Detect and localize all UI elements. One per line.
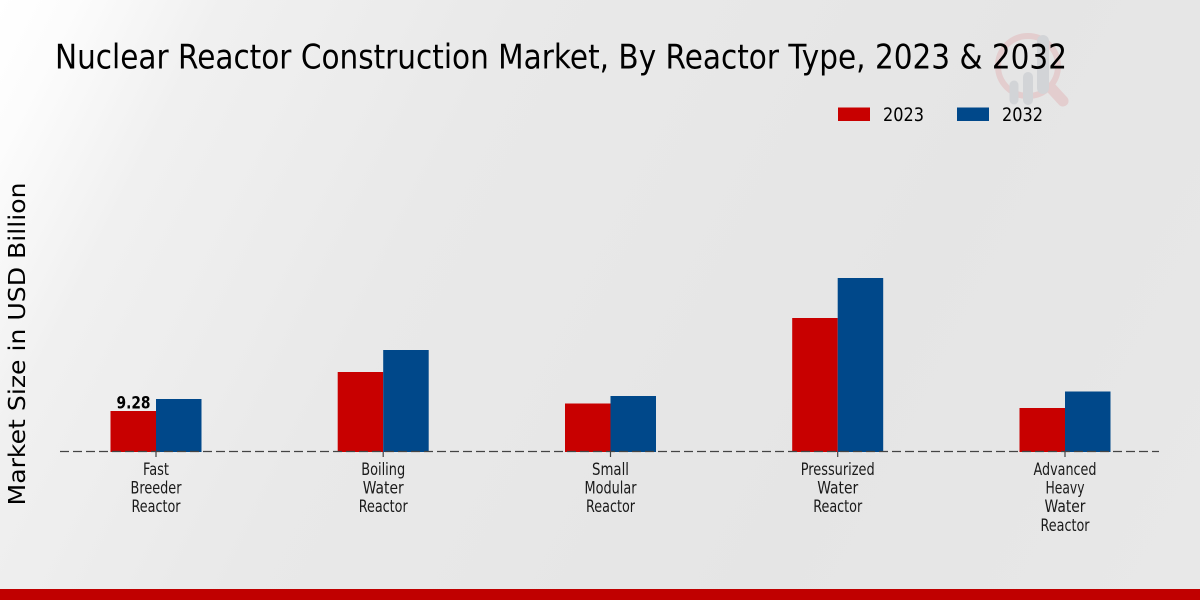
legend label: 2032: 2032 — [1002, 104, 1043, 126]
x axis baseline — [60, 450, 1159, 452]
category label: Small Modular Reactor: Modular — [584, 478, 637, 498]
bar chart — [60, 278, 1159, 457]
data label: 9.28: 9.28 — [116, 394, 150, 412]
y axis title: Market Size in USD Billion — [3, 183, 31, 505]
category label: Boiling Water Reactor: Water — [363, 478, 404, 498]
category label: Advanced Heavy Water Reactor: Reactor — [1040, 516, 1090, 535]
bars: Pressurized Water Reactor — [792, 278, 883, 452]
category label: Small Modular Reactor: Small — [592, 460, 629, 479]
category label: Fast Breeder Reactor: Reactor — [132, 497, 181, 516]
title: Nuclear Reactor Construction Market, By Reactor Type, 2023 & 2032 — [55, 38, 1067, 76]
category label: Small Modular Reactor — [584, 460, 637, 516]
category label: Pressurized Water Reactor — [801, 460, 875, 516]
bars: Small Modular Reactor — [565, 396, 656, 452]
category label: Boiling Water Reactor — [359, 460, 408, 516]
legend swatch: 2023 — [838, 108, 870, 121]
category label: Advanced Heavy Water Reactor: Water — [1044, 497, 1086, 516]
category label: Pressurized Water Reactor: Pressurized — [801, 460, 875, 479]
icon: watermark logo — [998, 36, 1063, 101]
category label: Small Modular Reactor: Reactor — [586, 497, 635, 516]
category label: Boiling Water Reactor: Boiling — [361, 460, 405, 479]
bars: Boiling Water Reactor — [338, 350, 429, 452]
category label: Fast Breeder Reactor: Breeder — [130, 478, 182, 498]
category label: Advanced Heavy Water Reactor — [1034, 460, 1096, 535]
category label: Advanced Heavy Water Reactor: Heavy — [1046, 478, 1085, 498]
legend label: 2023: 2023 — [883, 104, 924, 126]
bars: Fast Breeder Reactor — [110, 399, 202, 452]
category label: Advanced Heavy Water Reactor: Advanced — [1034, 460, 1096, 479]
category label: Pressurized Water Reactor: Reactor — [813, 497, 862, 516]
bars: Advanced Heavy Water Reactor — [1020, 392, 1110, 452]
footer bar — [0, 589, 1200, 600]
legend swatch: 2032 — [957, 108, 989, 121]
category label: Fast Breeder Reactor: Fast — [143, 460, 169, 479]
category label: Boiling Water Reactor: Reactor — [359, 497, 408, 516]
category label: Pressurized Water Reactor: Water — [817, 478, 858, 498]
category label: Fast Breeder Reactor — [130, 460, 182, 516]
legend — [838, 104, 1043, 126]
